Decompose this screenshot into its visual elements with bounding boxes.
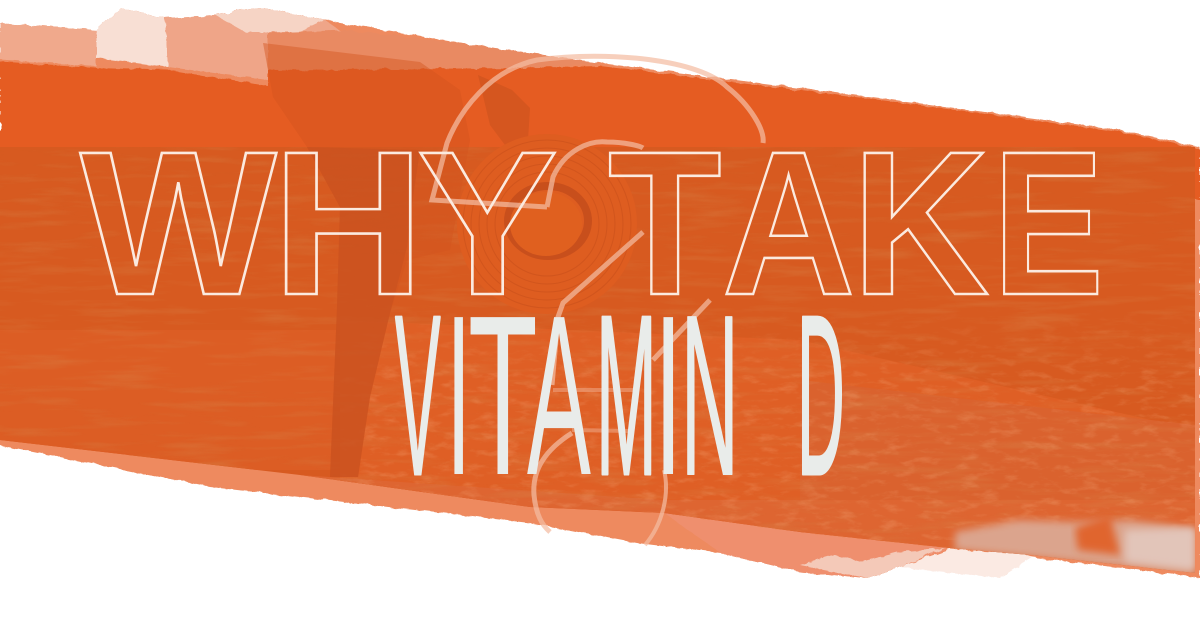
title: WHY TAKE: H xyxy=(272,110,424,338)
subtitle: VITAMIN D: V xyxy=(395,268,441,523)
sea photo band xyxy=(0,147,1200,590)
subtitle: VITAMIN D: A xyxy=(527,269,591,524)
subtitle: VITAMIN D: T xyxy=(468,269,538,523)
silhouette: woman on the beach xyxy=(263,43,530,477)
subtitle: VITAMIN D: M xyxy=(596,268,657,522)
subtitle: VITAMIN D: I xyxy=(446,268,471,523)
subtitle: VITAMIN D: N xyxy=(681,268,739,523)
subtitle: VITAMIN D xyxy=(395,268,845,524)
title: WHY TAKE: K xyxy=(852,108,989,338)
title: WHY TAKE xyxy=(80,108,1104,338)
subtitle: VITAMIN D: I xyxy=(654,269,683,523)
icon: striped sun hat xyxy=(457,134,637,314)
title: WHY TAKE: W xyxy=(80,108,277,338)
title: WHY TAKE: A xyxy=(722,109,855,338)
icon: large question mark outline xyxy=(432,56,763,545)
title: WHY TAKE: E xyxy=(993,108,1104,338)
subtitle: VITAMIN D: D xyxy=(797,268,845,523)
title: WHY TAKE: Y xyxy=(417,110,558,338)
title: WHY TAKE: T xyxy=(608,110,721,338)
